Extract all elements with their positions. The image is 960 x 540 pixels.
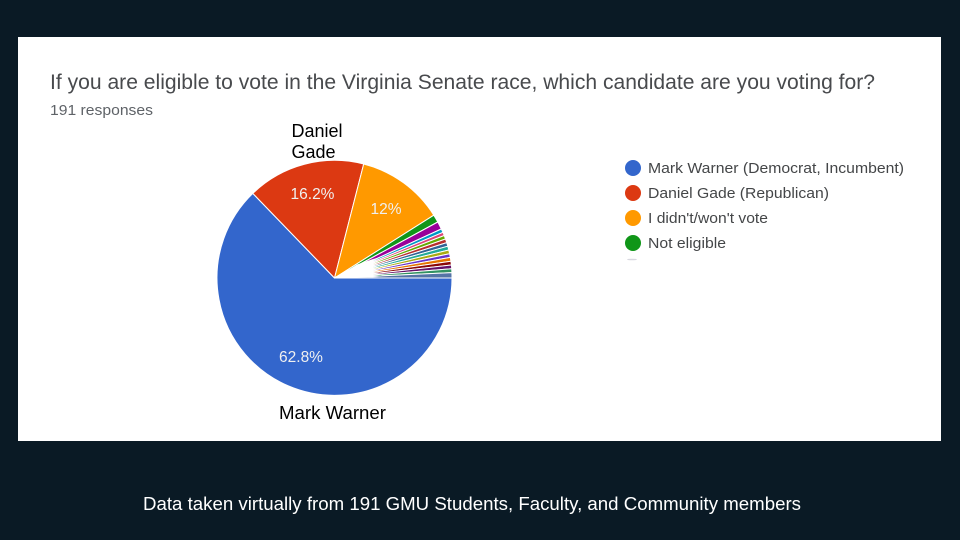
caption: data source: Data taken virtually from 191 GMU Students, Faculty, and Community members xyxy=(143,494,801,514)
slice: not eligible xyxy=(334,215,438,278)
panel: chart card xyxy=(18,37,941,441)
white hub where minor slices converge xyxy=(337,257,379,277)
heading: survey question: If you are eligible to vote in the Virginia Senate race, which candidate are you voting for? xyxy=(50,71,875,94)
legend item: clipped marker xyxy=(627,259,637,260)
legend item: did not vote: I didn't/won't vote xyxy=(648,210,768,227)
legend item: Daniel Gade: Daniel Gade (Republican) xyxy=(648,185,829,202)
annotation: Mark Warner: Mark Warner xyxy=(279,403,386,423)
slice: Daniel Gade 16.2% xyxy=(253,160,364,278)
chart: pie of candidate choice xyxy=(217,160,452,395)
text: response count: 191 responses xyxy=(50,102,153,119)
label: 16.2%: 16.2% xyxy=(291,186,335,203)
slice: Mark Warner 62.8% xyxy=(217,193,452,395)
label: 62.8%: 62.8% xyxy=(279,349,323,366)
annotation: Daniel Gade: Daniel xyxy=(292,121,343,141)
legend xyxy=(625,160,904,260)
legend item: Mark Warner: Mark Warner (Democrat, Incumbent) xyxy=(648,160,904,177)
annotation: Daniel Gade: Gade xyxy=(292,142,336,162)
slice: did not vote 12% xyxy=(334,164,434,278)
slices: minor candidates and write-ins xyxy=(334,222,452,278)
legend item: not eligible: Not eligible xyxy=(648,235,726,252)
label: 12%: 12% xyxy=(370,201,402,218)
